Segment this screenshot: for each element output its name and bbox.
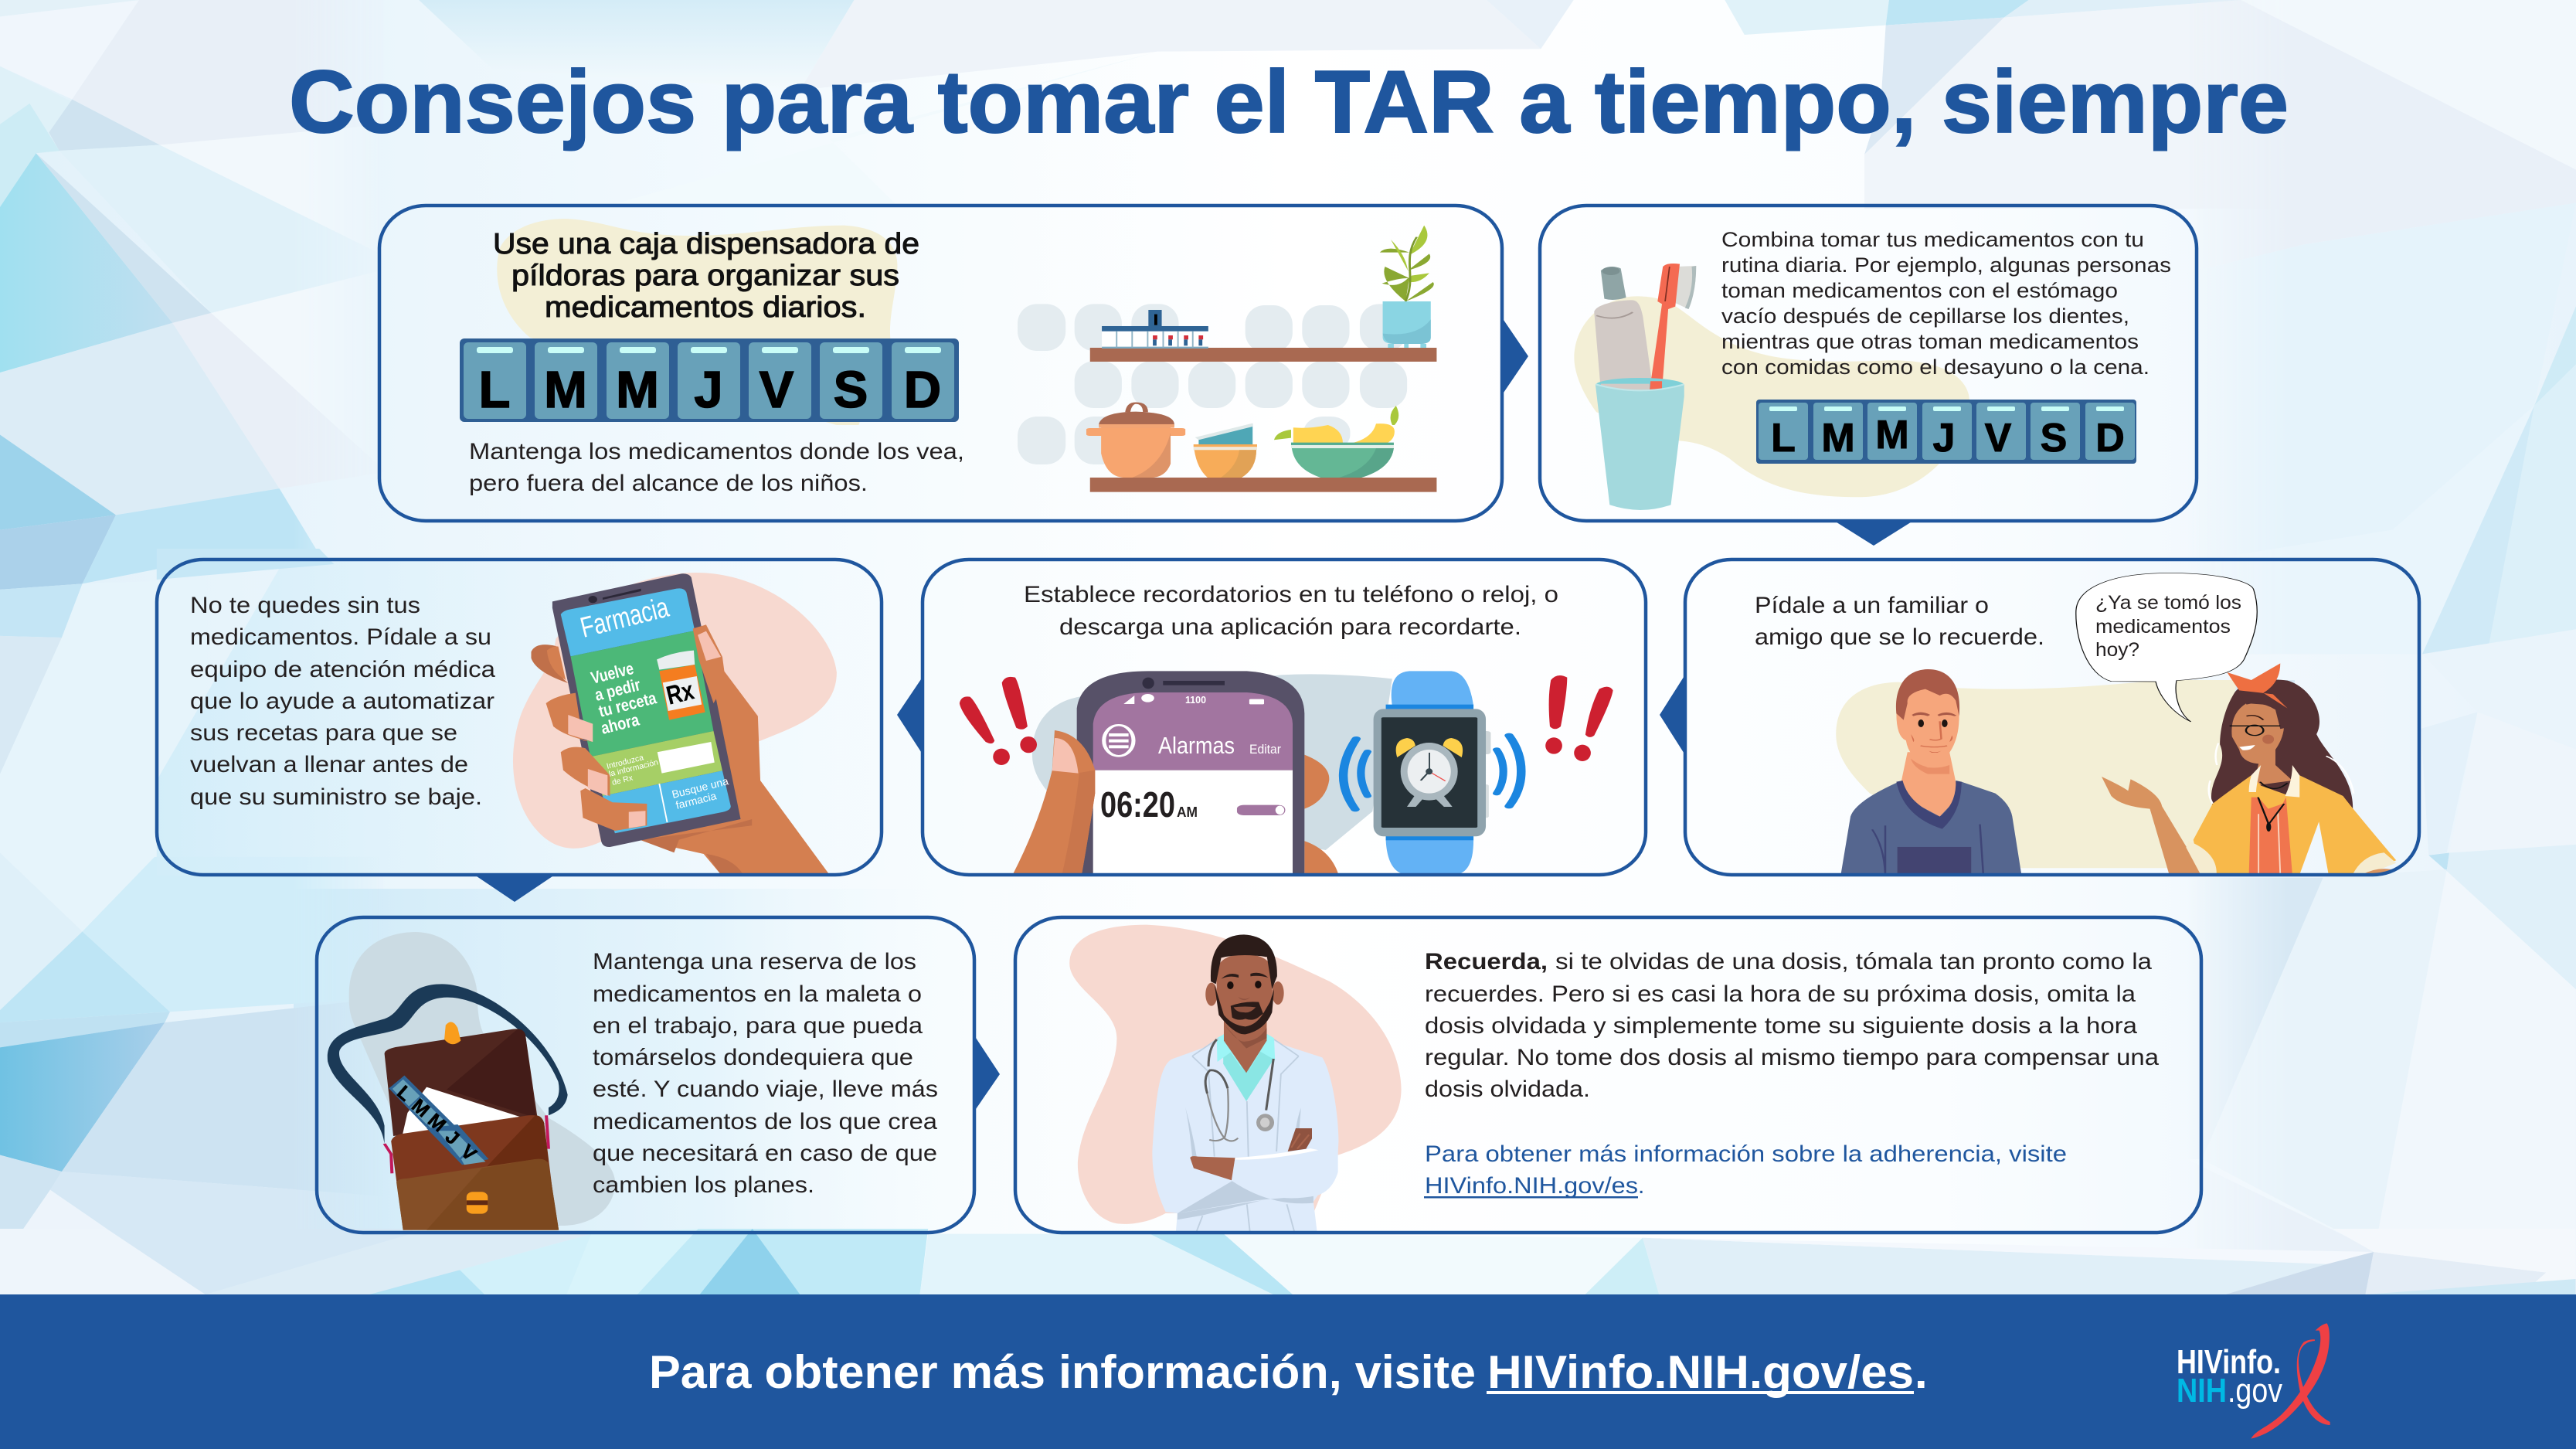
illustration: two people talking bbox=[1836, 663, 2396, 876]
illustration: hand holding pharmacy phone: farmacia bbox=[675, 789, 718, 811]
speech bubble bbox=[2076, 573, 2257, 722]
text block: keep a reserve: en el trabajo, para que pueda bbox=[593, 1013, 923, 1039]
arrow: panel 1 to panel 2 bbox=[1502, 318, 1528, 395]
text block: ask a relative bbox=[1755, 593, 2044, 650]
illustration: bag with pill box: V bbox=[457, 1141, 481, 1165]
logo: HIVinfo.NIH.gov: HIVinfo. bbox=[2177, 1343, 2281, 1381]
illustration: hand holding pharmacy phone: ahora bbox=[599, 709, 641, 738]
illustration: hand holding pharmacy phone: la información bbox=[608, 757, 659, 779]
panel: refills bbox=[157, 560, 882, 875]
pill box: L M M J V S D: L bbox=[1771, 416, 1796, 461]
text block: storage advice: Mantenga los medicamentos donde los vea, bbox=[469, 439, 964, 464]
text block: do not run out: sus recetas para que se bbox=[190, 720, 457, 746]
text block: missed dose: dosis olvidada y simplemente tome su siguiente dosis a la hora bbox=[1425, 1013, 2137, 1039]
footer text bbox=[649, 1346, 1928, 1398]
text block: do not run out bbox=[190, 593, 495, 810]
text block: keep a reserve: que necesitará en caso de que bbox=[593, 1141, 937, 1166]
text block: keep a reserve: medicamentos en la maleta o bbox=[593, 981, 922, 1007]
text block: combine with routine: con comidas como el desayuno o la cena. bbox=[1721, 355, 2149, 379]
text block: combine with routine: vacío después de cepillarse los dientes, bbox=[1721, 304, 2129, 328]
panel: reminder about missed dose bbox=[1015, 917, 2201, 1233]
illustration: phone alarm and smartwatch: Alarmas bbox=[1158, 732, 1235, 759]
speech bubble: hoy? bbox=[2095, 639, 2139, 661]
illustration: hand holding pharmacy phone: Farmacia bbox=[577, 591, 672, 644]
logo: HIVinfo.NIH.gov: .gov bbox=[2228, 1372, 2282, 1410]
arrow: panel 6 to panel 7 bbox=[974, 1036, 1000, 1111]
illustration: phone alarm and smartwatch: 1100 bbox=[1185, 694, 1206, 706]
text block: do not run out: que lo ayude a automatizar bbox=[190, 689, 494, 714]
illustration: hand holding pharmacy phone: tu receta bbox=[596, 688, 659, 721]
pill box: L M M J V S D: L bbox=[479, 361, 510, 419]
text block: missed dose: Recuerda, bbox=[1425, 949, 1548, 975]
link: more information bbox=[1424, 1141, 2067, 1199]
pill box: L M M J V S D: M bbox=[1875, 413, 1909, 457]
text block: do not run out: medicamentos. Pídale a su bbox=[190, 624, 491, 650]
text block: combine with routine: toman medicamentos con el estómago bbox=[1721, 279, 2118, 302]
link: more information: . bbox=[1638, 1173, 1644, 1199]
text block: missed dose: regular. No tome dos dosis al mismo tiempo para compensar una bbox=[1425, 1045, 2159, 1070]
arrow: panel 5 to panel 4 bbox=[1660, 675, 1685, 755]
link: more information: Para obtener más información sobre la adherencia, visite bbox=[1425, 1141, 2067, 1167]
text block: keep a reserve: cambien los planes. bbox=[593, 1172, 814, 1198]
illustration: phone alarm and smartwatch: 06:20 bbox=[1100, 784, 1175, 825]
pill box: L M M J V S D: M bbox=[544, 361, 587, 419]
illustration: phone alarm and smartwatch: AM bbox=[1177, 804, 1198, 820]
text block: keep a reserve: Mantenga una reserva de los bbox=[593, 949, 916, 975]
text block: missed dose: recuerdes. Pero si es casi la hora de su próxima dosis, omita la bbox=[1425, 981, 2136, 1007]
pill box: L M M J V S D: V bbox=[1985, 416, 2012, 461]
text block: ask a relative: amigo que se lo recuerde. bbox=[1755, 624, 2044, 650]
illustration: bag with pill box: M bbox=[423, 1110, 450, 1136]
text block: ask a relative: Pídale a un familiar o bbox=[1755, 593, 1989, 618]
illustration: hand holding pharmacy phone: Vuelve bbox=[589, 658, 636, 688]
text block: keep a reserve bbox=[593, 949, 938, 1198]
panel: reserve supply bbox=[317, 917, 974, 1233]
title: Consejos para tomar el TAR a tiempo, siempre bbox=[289, 53, 2289, 151]
text block: keep a reserve: esté. Y cuando viaje, lleve más bbox=[593, 1077, 938, 1102]
pill box: L M M J V S D: M bbox=[1821, 416, 1855, 461]
speech bubble: medicamentos bbox=[2095, 616, 2231, 638]
panel: ask a friend bbox=[1685, 560, 2419, 876]
illustration: cream blob bbox=[497, 219, 897, 425]
illustration: hand holding pharmacy phone: Rx bbox=[664, 675, 697, 711]
illustration: bag with pill box: L bbox=[393, 1081, 416, 1106]
text block: storage advice: pero fuera del alcance de los niños. bbox=[469, 471, 868, 496]
text block: do not run out: que su suministro se baje. bbox=[190, 784, 482, 810]
text block: combine with routine: Combina tomar tus medicamentos con tu bbox=[1721, 228, 2144, 251]
footer text: HIVinfo.NIH.gov/es bbox=[1487, 1346, 1914, 1398]
panel: pill organizer bbox=[379, 206, 1502, 521]
footer text: Para obtener más información, visite bbox=[649, 1346, 1476, 1398]
text block: missed dose: si te olvidas de una dosis, tómala tan pronto como la bbox=[1555, 949, 2152, 975]
text block: missed dose bbox=[1425, 949, 2159, 1102]
pill box: L M M J V S D bbox=[1756, 400, 2136, 464]
logo: HIVinfo.NIH.gov: NIH bbox=[2177, 1372, 2227, 1410]
footer text: . bbox=[1915, 1346, 1928, 1398]
illustration: cream blob bbox=[1574, 296, 1969, 497]
text block: do not run out: No te quedes sin tus bbox=[190, 593, 420, 618]
illustration: hand holding pharmacy phone: de Rx bbox=[611, 773, 634, 787]
text block: missed dose: dosis olvidada. bbox=[1425, 1077, 1590, 1102]
pill box: L M M J V S D: S bbox=[2041, 416, 2067, 461]
text block: combine with routine: mientras que otras toman medicamentos bbox=[1721, 330, 2139, 353]
heading: use a pill box bbox=[493, 228, 919, 324]
link: more information: HIVinfo.NIH.gov/es bbox=[1425, 1173, 1638, 1199]
text block: storage advice bbox=[469, 439, 964, 496]
text block: do not run out: vuelvan a llenar antes de bbox=[190, 752, 468, 777]
pill box: L M M J V S D bbox=[460, 338, 959, 422]
logo: HIVinfo.NIH.gov bbox=[2177, 1323, 2330, 1439]
footer band bbox=[0, 1294, 2576, 1449]
illustration: bag with pill box: J bbox=[441, 1126, 464, 1149]
panel: daily routine bbox=[1540, 206, 2197, 521]
arrow: panel 4 to panel 3 bbox=[897, 677, 923, 754]
illustration: hand holding pharmacy phone: Introduzca bbox=[606, 753, 644, 771]
panel: reminders bbox=[923, 560, 1646, 876]
heading: use a pill box: Use una caja dispensadora de bbox=[493, 228, 919, 260]
pill box: L M M J V S D: D bbox=[904, 361, 941, 419]
illustration: hand holding pharmacy phone: a pedir bbox=[593, 675, 643, 705]
text block: combine with routine bbox=[1721, 228, 2171, 379]
pill box: L M M J V S D: S bbox=[834, 361, 868, 419]
illustration: phone alarm and smartwatch: Editar bbox=[1249, 742, 1281, 757]
illustration: toothbrush and toothpaste in a cup bbox=[1594, 264, 1696, 510]
illustration: hand holding pharmacy phone: Busque una bbox=[671, 774, 729, 801]
pill box: L M M J V S D: J bbox=[694, 361, 723, 419]
illustration: shelves with kitchen items bbox=[1018, 226, 1436, 492]
illustration: hand holding pharmacy phone bbox=[513, 573, 837, 875]
text block: set reminders: Establece recordatorios en tu teléfono o reloj, o bbox=[1024, 582, 1558, 607]
text block: do not run out: equipo de atención médica bbox=[190, 657, 495, 682]
text block: set reminders bbox=[1024, 582, 1558, 640]
pill box: L M M J V S D: V bbox=[760, 361, 794, 419]
pill box: L M M J V S D: D bbox=[2095, 416, 2125, 461]
heading: use a pill box: píldoras para organizar sus bbox=[511, 260, 899, 292]
arrow: panel 2 down bbox=[1834, 521, 1913, 546]
speech bubble: ¿Ya se tomó los bbox=[2095, 592, 2241, 614]
text block: combine with routine: rutina diaria. Por ejemplo, algunas personas bbox=[1721, 253, 2171, 277]
pill box: L M M J V S D: M bbox=[616, 361, 659, 419]
illustration: phone alarm and smartwatch bbox=[960, 671, 1613, 876]
pill box: L M M J V S D: J bbox=[1933, 416, 1955, 461]
text block: keep a reserve: medicamentos de los que crea bbox=[593, 1109, 937, 1134]
heading: use a pill box: medicamentos diarios. bbox=[545, 291, 866, 324]
text block: keep a reserve: tomárselos dondequiera que bbox=[593, 1045, 913, 1070]
illustration: bag with pill box bbox=[328, 932, 615, 1230]
text block: set reminders: descarga una aplicación para recordarte. bbox=[1059, 614, 1521, 640]
illustration: doctor bbox=[1069, 925, 1402, 1231]
illustration: bag with pill box: M bbox=[407, 1095, 433, 1121]
arrow: panel 3 down bbox=[474, 875, 555, 902]
